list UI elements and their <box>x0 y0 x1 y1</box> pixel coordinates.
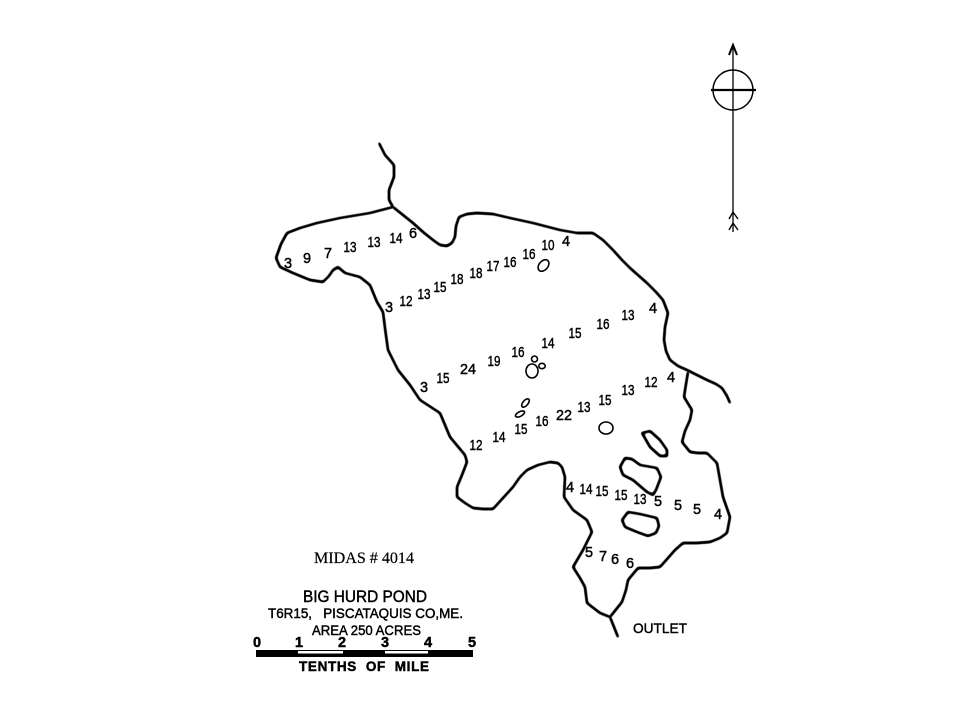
depth soundings: row 5: 13 <box>634 492 646 508</box>
depth soundings: row 2: 10 <box>542 238 554 254</box>
depth soundings: row 5: 5 <box>693 502 701 518</box>
depth soundings: row 2: 16 <box>522 247 536 263</box>
text: pond area: AREA 250 ACRES <box>312 622 421 638</box>
depth soundings: row 1: 6 <box>409 226 417 242</box>
depth soundings: row 4: 15 <box>598 393 612 409</box>
depth soundings: row 1: 14 <box>390 231 402 247</box>
scale bar: 5 <box>468 635 476 651</box>
depth soundings: row 1 <box>284 226 417 272</box>
depth soundings: row 3: 4 <box>649 301 657 317</box>
depth soundings: row 1: 13 <box>368 235 380 251</box>
depth soundings: row 2: 15 <box>434 280 446 296</box>
scale bar: 2 <box>338 635 346 651</box>
depth soundings: row 3: 16 <box>512 345 524 361</box>
depth soundings: row 2: 12 <box>400 294 412 310</box>
depth soundings: row 1: 7 <box>324 246 332 262</box>
label: outlet: OUTLET <box>633 620 687 636</box>
depth soundings: row 6: 6 <box>626 556 634 572</box>
depth soundings: row 2 <box>385 234 570 316</box>
islands <box>515 258 667 536</box>
depth soundings: row 2: 17 <box>486 259 500 275</box>
depth soundings: row 5: 4 <box>566 480 574 496</box>
depth soundings: row 4: 12 <box>470 438 482 454</box>
depth soundings: row 3: 24 <box>460 362 476 378</box>
depth soundings: row 4: 14 <box>492 430 506 446</box>
icon: north arrow compass <box>711 45 756 232</box>
depth soundings: row 4 <box>470 370 675 454</box>
title: pond name: BIG HURD POND <box>303 588 427 606</box>
scale bar: 3 <box>381 635 389 651</box>
depth soundings: row 4: 12 <box>644 375 658 391</box>
depth soundings: row 4: 4 <box>667 370 675 386</box>
depth soundings: row 2: 18 <box>470 266 482 282</box>
depth soundings: row 2: 4 <box>562 234 570 250</box>
north inlet stream <box>379 143 394 207</box>
scale bar: 4 <box>424 635 432 651</box>
depth soundings: row 2: 13 <box>418 287 430 303</box>
scale bar: 0 <box>253 635 261 651</box>
depth soundings: row 3: 19 <box>488 354 500 370</box>
depth soundings: row 4: 16 <box>536 414 548 430</box>
depth soundings: row 4: 13 <box>622 383 634 399</box>
east shore and south-east bay <box>610 372 730 617</box>
depth soundings: row 5 <box>566 480 722 523</box>
depth soundings: row 4: 22 <box>556 408 572 424</box>
depth soundings: row 2: 18 <box>450 272 464 288</box>
depth soundings: row 2: 16 <box>504 255 516 271</box>
depth soundings: row 3: 14 <box>542 336 554 352</box>
depth soundings: row 5: 14 <box>580 482 592 498</box>
scale caption: TENTHS OF MILE <box>299 659 429 674</box>
scale bar <box>253 635 476 657</box>
depth soundings: row 5: 5 <box>654 494 662 510</box>
depth soundings: row 6 <box>585 545 634 572</box>
depth soundings: row 3 <box>420 301 657 396</box>
depth soundings: row 3: 16 <box>596 317 610 333</box>
depth soundings: row 3: 15 <box>568 326 582 342</box>
depth soundings: row 5: 4 <box>714 507 722 523</box>
depth soundings: row 1: 13 <box>344 240 356 256</box>
depth soundings: row 3: 3 <box>420 380 428 396</box>
depth soundings: row 5: 15 <box>596 484 608 500</box>
shoreline of the pond <box>276 207 730 617</box>
outlet stream <box>610 617 618 637</box>
depth soundings: row 4: 15 <box>514 422 528 438</box>
label: MIDAS number: MIDAS # 4014 <box>314 550 414 567</box>
depth soundings: row 4: 13 <box>578 400 590 416</box>
scale bar: 1 <box>295 635 303 651</box>
text: township and county: T6R15, PISCATAQUIS CO,ME. <box>268 605 463 621</box>
depth soundings: row 1: 9 <box>303 251 311 267</box>
depth soundings: row 5: 5 <box>674 498 682 514</box>
depth soundings: row 3: 15 <box>436 371 450 387</box>
depth soundings: row 6: 5 <box>585 545 593 561</box>
depth soundings: row 5: 15 <box>614 488 628 504</box>
depth soundings: row 6: 7 <box>599 549 607 565</box>
depth soundings: row 6: 6 <box>611 552 619 568</box>
depth soundings: row 2: 3 <box>385 300 393 316</box>
depth soundings: row 1: 3 <box>284 256 292 272</box>
depth soundings: row 3: 13 <box>622 308 634 324</box>
